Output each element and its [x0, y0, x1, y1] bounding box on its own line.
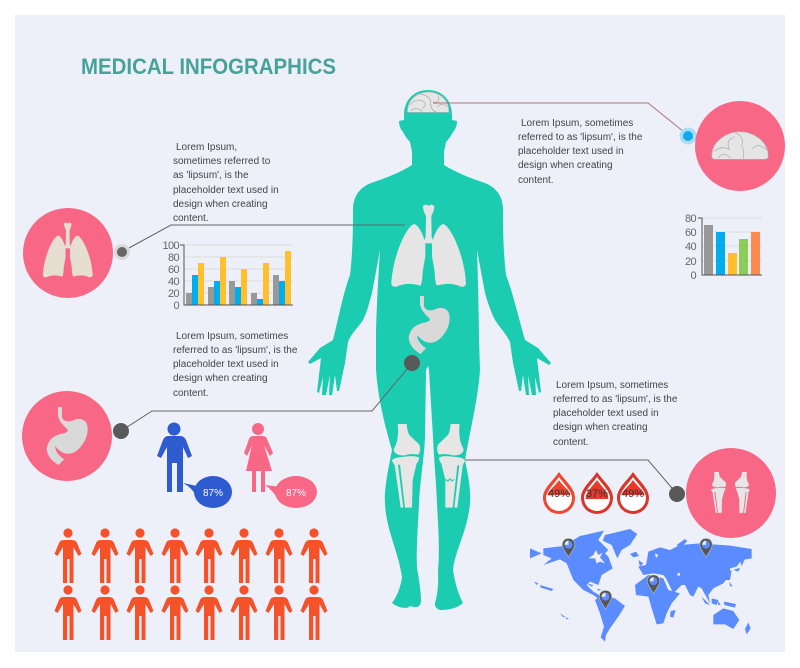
text block: brain: Lorem Ipsum, sometimes [521, 118, 633, 129]
drop gauge 37% [581, 472, 613, 514]
bar chart: grouped: 60 [168, 264, 179, 276]
text block: stomach: content. [173, 388, 209, 399]
drop gauge 37%: 37% [586, 488, 608, 500]
connector: knee [465, 460, 685, 502]
brain in body [407, 92, 449, 112]
text block: stomach: placeholder text used in [173, 359, 279, 370]
text block: brain [518, 118, 643, 186]
icon: man with callout [157, 422, 232, 508]
bar chart: grouped: 80 [168, 252, 179, 264]
text block: stomach [173, 331, 298, 399]
text block: stomach: Lorem Ipsum, sometimes [176, 331, 288, 342]
knee bones in body [392, 424, 465, 508]
bar chart: grouped: 40 [168, 276, 179, 288]
pictogram: orange people [54, 528, 328, 640]
text block: brain: referred to as 'lipsum', is the [518, 132, 643, 143]
drop gauge 49%: 49% [548, 488, 570, 500]
text block: knee: placeholder text used in [553, 408, 659, 419]
text block: brain: placeholder text used in [518, 146, 624, 157]
text block: knee: Lorem Ipsum, sometimes [556, 380, 668, 391]
text block: knee: referred to as 'lipsum', is the [553, 394, 678, 405]
callout: 87% blue: 87% [203, 488, 223, 499]
stomach in body [409, 296, 450, 354]
title: MEDICAL INFOGRAPHICS [81, 54, 336, 79]
bar chart: grouped: 20 [168, 288, 179, 300]
text block: lungs: sometimes referred to [173, 156, 271, 167]
icon: woman with callout [244, 423, 317, 508]
text block: brain: content. [518, 175, 554, 186]
bar chart: grouped [162, 240, 293, 312]
text block: stomach: referred to as 'lipsum', is the [173, 345, 298, 356]
world map [530, 529, 752, 642]
map pin: South America [599, 590, 612, 609]
text block: lungs: design when creating [173, 199, 268, 210]
text block: knee [553, 380, 678, 448]
bar chart: single series: 60 [685, 227, 696, 239]
icon: brain circle [695, 101, 785, 191]
body silhouette [308, 90, 551, 610]
callout: 87% pink: 87% [286, 488, 306, 499]
bar chart: grouped: 100 [162, 240, 179, 252]
map pin: Africa [647, 575, 660, 594]
human body figure [308, 90, 551, 610]
icon: lungs circle [23, 208, 113, 298]
bar chart: single series: 20 [685, 256, 696, 268]
bar chart: single series: 0 [690, 270, 696, 282]
drop gauge 49% second [617, 472, 649, 514]
icon: knee circle [686, 448, 776, 538]
text block: knee: content. [553, 437, 589, 448]
Old world continents [635, 539, 752, 634]
text block: stomach: design when creating [173, 373, 268, 384]
bar chart: grouped: 0 [173, 300, 179, 312]
text block: lungs: content. [173, 213, 209, 224]
Americas and Pacific islands [530, 529, 639, 642]
bar chart: single series [685, 213, 762, 282]
bar chart: single series: 40 [685, 241, 696, 253]
text block: lungs: as 'lipsum', is the [173, 170, 249, 181]
drop gauge 49% [543, 472, 575, 514]
text block: knee: design when creating [553, 422, 648, 433]
connector: lungs [114, 225, 405, 260]
text block: brain: design when creating [518, 160, 613, 171]
drop gauge 49% second: 49% [622, 488, 644, 500]
text block: lungs: Lorem Ipsum, [176, 142, 237, 153]
text block: lungs: placeholder text used in [173, 185, 279, 196]
connector: stomach [113, 355, 420, 439]
connector: brain [433, 103, 696, 144]
map pin: Asia [700, 538, 712, 557]
map pin: North America [562, 538, 575, 557]
lungs in body [391, 205, 466, 287]
icon: stomach circle [22, 391, 112, 481]
bar chart: single series: 80 [685, 213, 696, 225]
text block: lungs [173, 142, 279, 224]
